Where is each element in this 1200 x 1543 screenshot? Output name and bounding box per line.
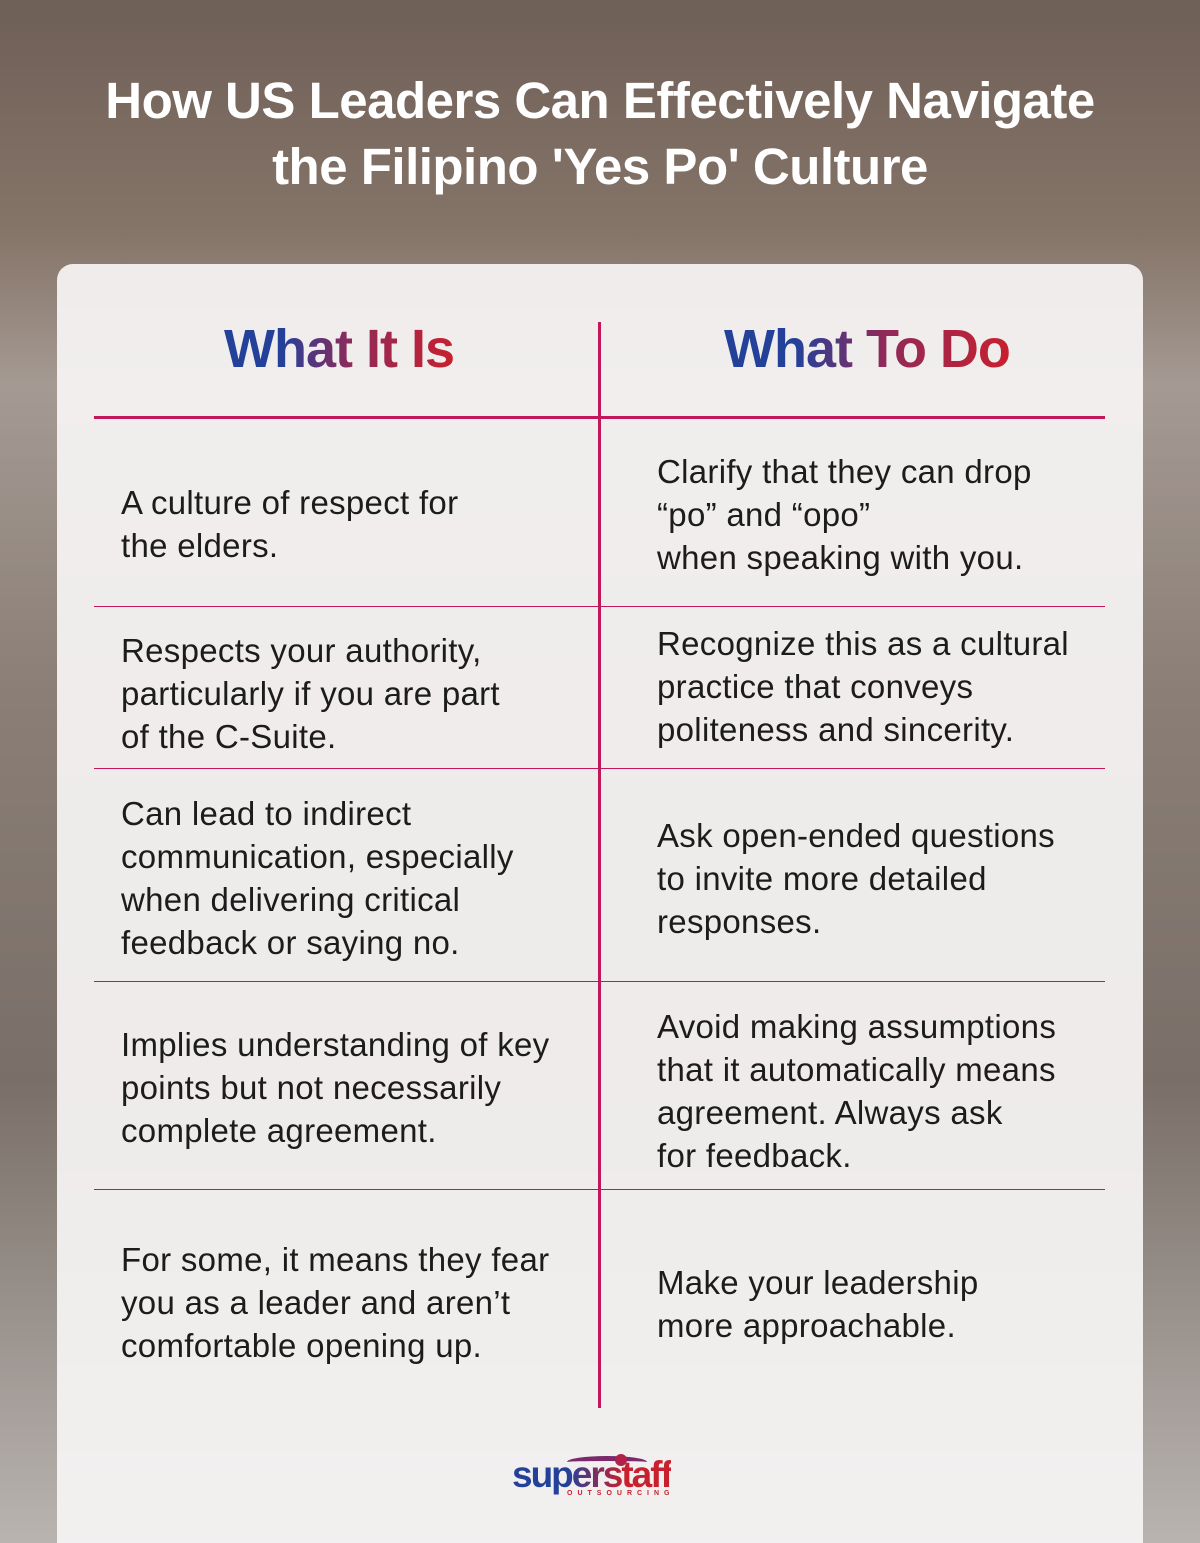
text: right row 5: Make your leadership bbox=[657, 1264, 978, 1301]
text: left row 3: when delivering critical bbox=[121, 881, 460, 918]
text: right row 3: Ask open-ended questions bbox=[657, 817, 1055, 854]
text: right row 3 bbox=[657, 817, 1055, 940]
text: right row 4: agreement. Always ask bbox=[657, 1094, 1003, 1131]
text: right row 2: politeness and sincerity. bbox=[657, 711, 1014, 748]
text: left row 2 bbox=[121, 632, 500, 755]
text: left row 1: A culture of respect for bbox=[121, 484, 458, 521]
title: How US Leaders Can Effectively Navigate bbox=[105, 72, 1095, 129]
heading: what to do: What To Do bbox=[724, 319, 1010, 379]
text: right row 1: “po” and “opo” bbox=[657, 496, 870, 533]
text: left row 3: Can lead to indirect bbox=[121, 795, 411, 832]
text: right row 3: to invite more detailed bbox=[657, 860, 987, 897]
text: left row 5: you as a leader and aren’t bbox=[121, 1284, 510, 1321]
text: left row 4: complete agreement. bbox=[121, 1112, 437, 1149]
text: right row 2: Recognize this as a cultural bbox=[657, 625, 1069, 662]
text: left row 1 bbox=[121, 484, 458, 564]
logo: superstaff bbox=[512, 1454, 671, 1495]
text: left row 3 bbox=[121, 795, 514, 961]
text: left row 2: of the C-Suite. bbox=[121, 718, 336, 755]
text: left row 2: Respects your authority, bbox=[121, 632, 482, 669]
logo: OUTSOURCING bbox=[567, 1490, 674, 1497]
text: right row 4: that it automatically means bbox=[657, 1051, 1056, 1088]
text: right row 4 bbox=[657, 1008, 1056, 1174]
text: left row 4: Implies understanding of key bbox=[121, 1026, 549, 1063]
text: left row 4: points but not necessarily bbox=[121, 1069, 501, 1106]
text: right row 4: Avoid making assumptions bbox=[657, 1008, 1056, 1045]
text: left row 3: feedback or saying no. bbox=[121, 924, 460, 961]
text: right row 2 bbox=[657, 625, 1069, 748]
text: left row 5 bbox=[121, 1241, 549, 1364]
text: left row 5: For some, it means they fear bbox=[121, 1241, 549, 1278]
text: left row 1: the elders. bbox=[121, 527, 278, 564]
text: left row 4 bbox=[121, 1026, 549, 1149]
text: right row 4: for feedback. bbox=[657, 1137, 852, 1174]
heading: what it is: What It Is bbox=[224, 319, 454, 379]
text: right row 5: more approachable. bbox=[657, 1307, 956, 1344]
text: left row 5: comfortable opening up. bbox=[121, 1327, 482, 1364]
panel: table bbox=[57, 264, 1143, 1543]
text: right row 3: responses. bbox=[657, 903, 821, 940]
text: right row 1 bbox=[657, 453, 1032, 576]
text: left row 3: communication, especially bbox=[121, 838, 514, 875]
text: right row 2: practice that conveys bbox=[657, 668, 973, 705]
title: the Filipino 'Yes Po' Culture bbox=[272, 138, 928, 195]
text: left row 2: particularly if you are part bbox=[121, 675, 500, 712]
text: right row 1: when speaking with you. bbox=[657, 539, 1023, 576]
text: right row 5 bbox=[657, 1264, 978, 1344]
title bbox=[105, 72, 1095, 195]
text: right row 1: Clarify that they can drop bbox=[657, 453, 1032, 490]
